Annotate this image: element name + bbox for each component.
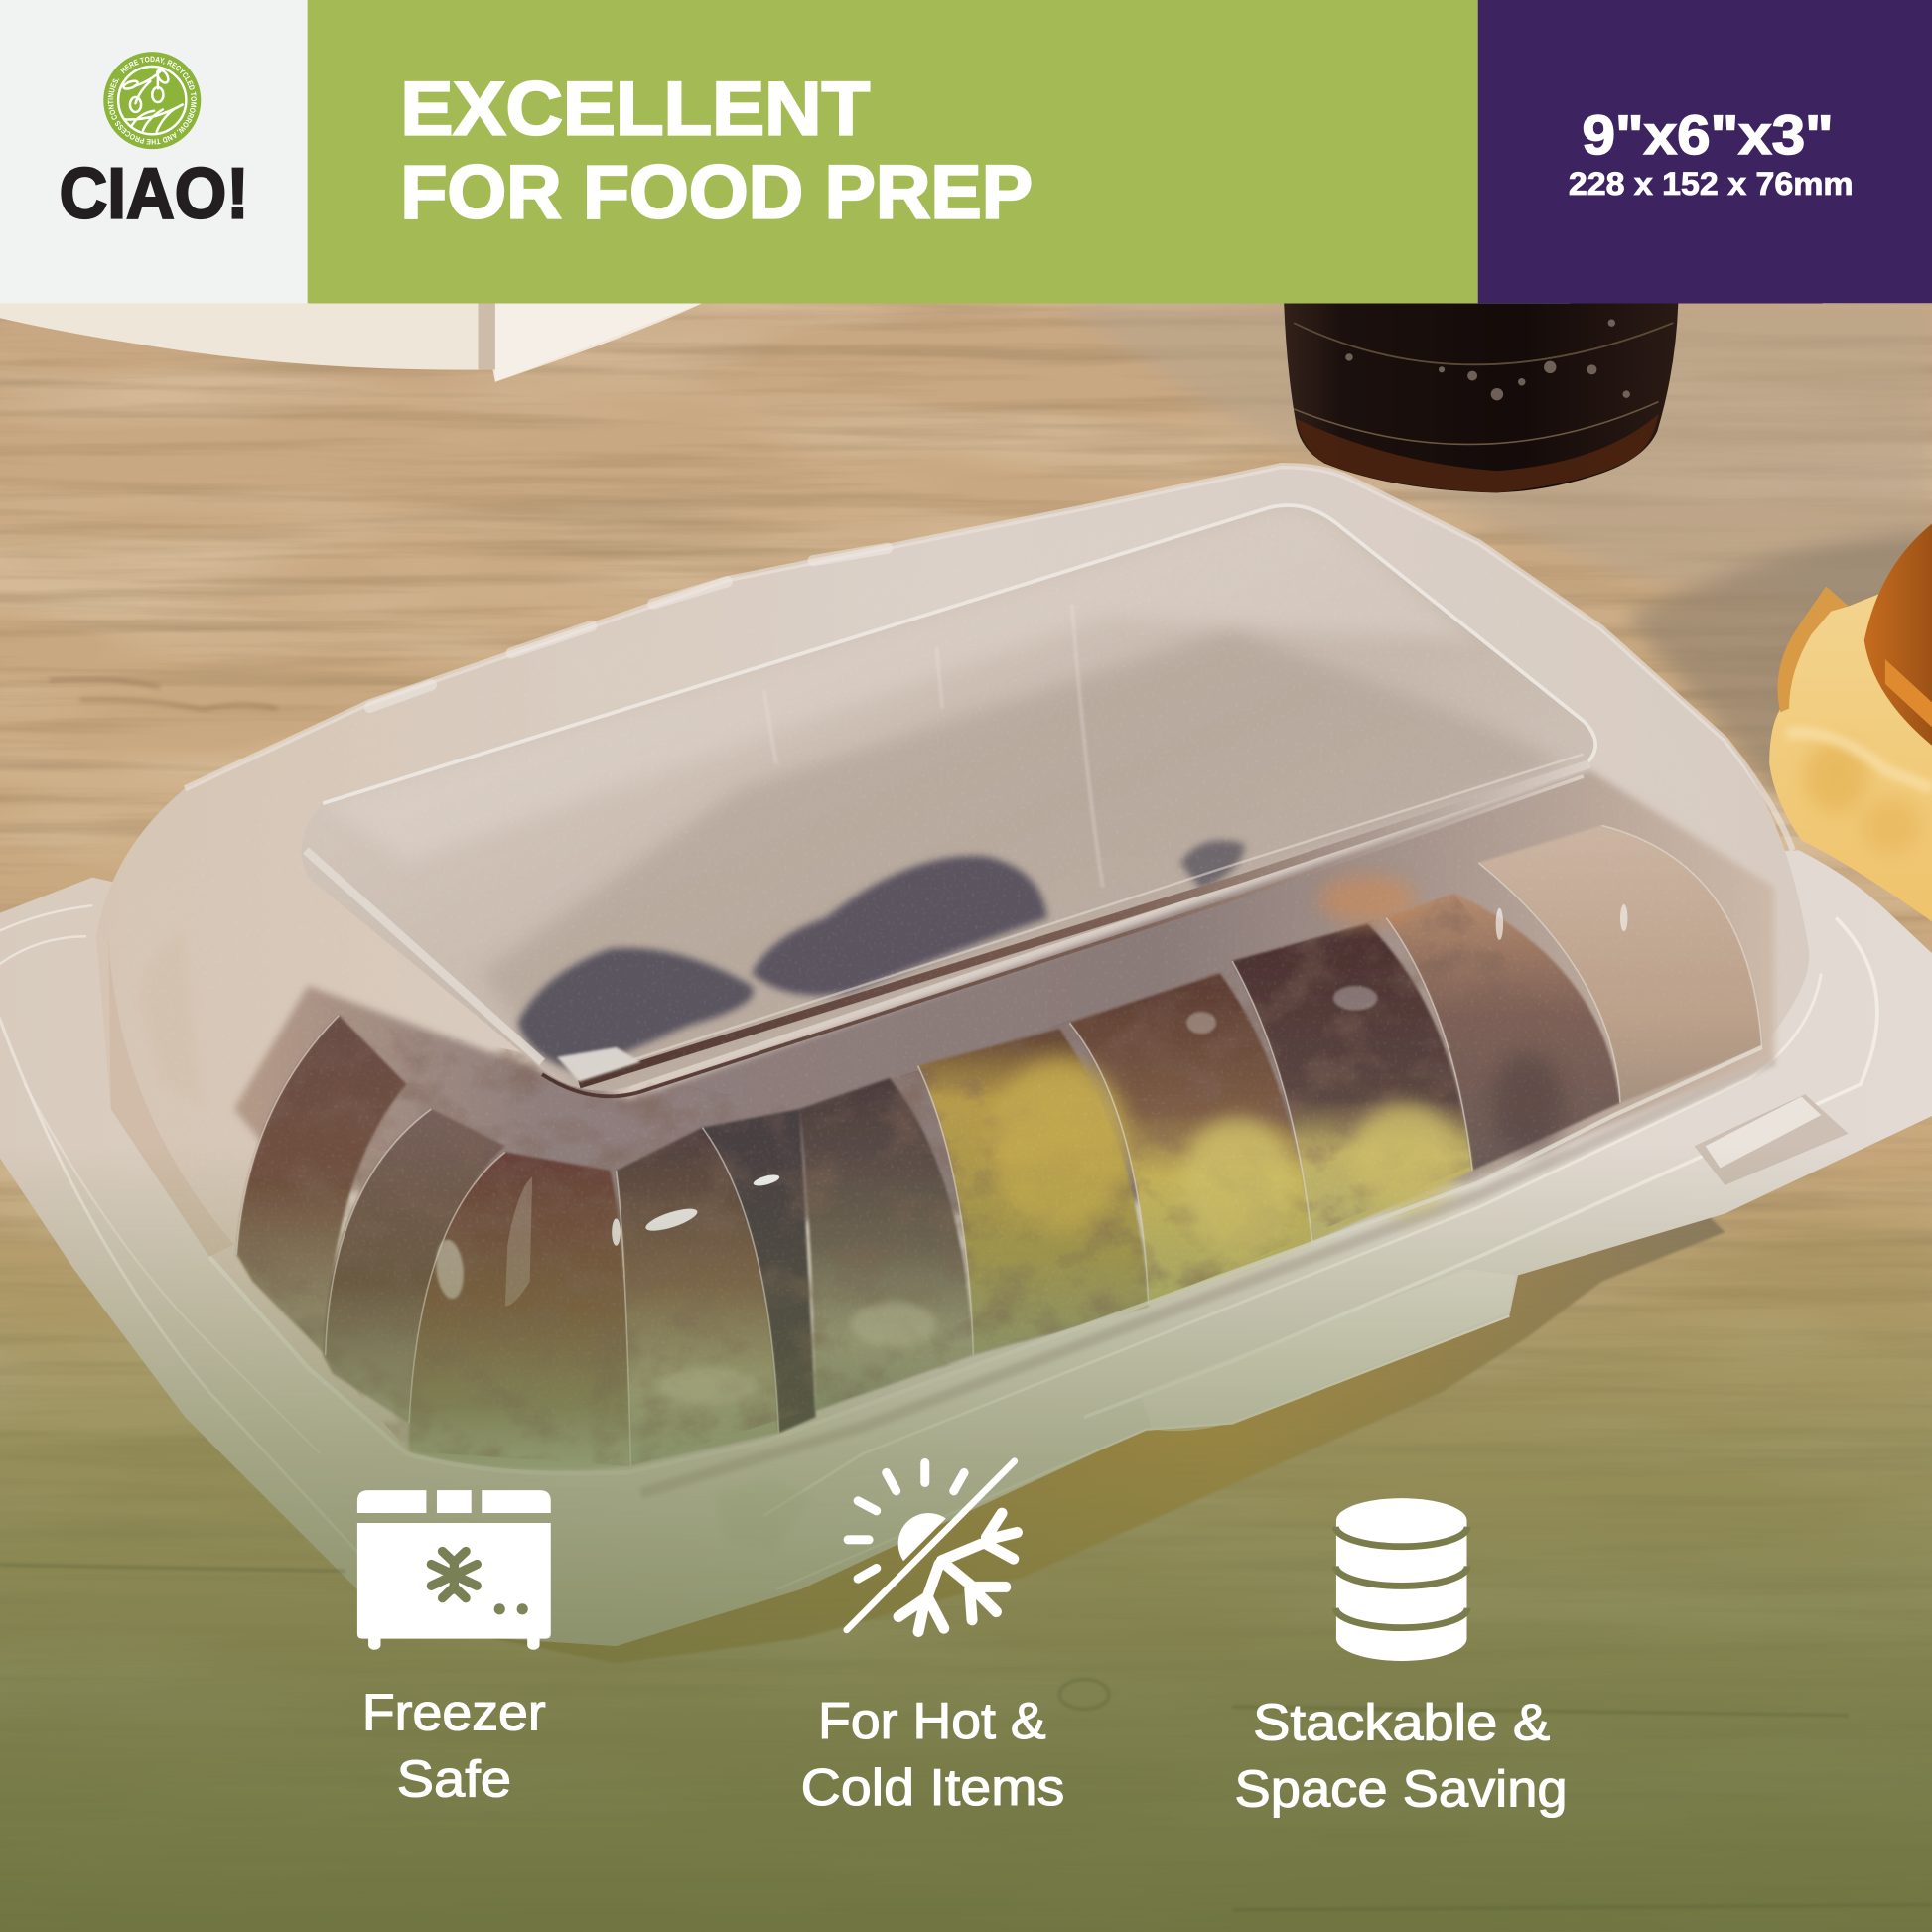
header: logo panel [0,0,347,304]
label: for hot and cold items: For Hot & [818,1693,1046,1750]
bread bun [1769,523,1932,921]
header: size panel [1478,0,1932,303]
wood knot and dark grain lines [0,1565,1932,1910]
logo emblem: HERE TODAY, RECYCLED TOMORROW. AND THE PROCESS CONTINUES. [107,56,197,145]
feature: hot and cold [801,1461,1064,1817]
paper towel roll [0,303,702,382]
rib edge lines [236,826,1762,1466]
icon: stacked discs [1335,1498,1467,1661]
feature: stackable [1235,1498,1568,1818]
feature: freezer safe [357,1490,551,1808]
size in millimetres: 228 x 152 x 76mm [1569,166,1854,202]
label: for hot and cold items: Cold Items [801,1759,1064,1817]
label: stackable and space saving: Space Saving [1235,1760,1568,1818]
label: freezer safe: Safe [397,1750,511,1808]
container: front rim around wall [209,1047,1762,1473]
olive gradient overlay [0,1146,1932,1932]
container: ribbed front wall with food [236,826,1762,1470]
container: recessed lid panel [302,505,1595,1109]
container: dome lid body [96,463,1809,1269]
ribs group [236,826,1762,1470]
container: lower tray with food [496,1217,1725,1663]
label: freezer safe [362,1684,546,1808]
container: base flange [0,850,1932,1646]
size in inches: 9"x6"x3" [1583,103,1834,166]
title [400,67,1033,235]
header: title panel [308,0,1478,303]
specular highlights [433,904,1627,1405]
texture specks on plastic [96,479,1811,1472]
label: freezer safe: Freezer [362,1684,546,1741]
soda cup [1284,303,1678,492]
title: FOR FOOD PREP [400,151,1033,235]
food: mottled texture [236,894,1620,1466]
icon: crossed sun and snowflake [847,1461,1017,1631]
container: wall band beneath lid [234,770,1774,1232]
label: for hot and cold items [801,1693,1064,1817]
icon: freezer [357,1490,551,1650]
food: golden pieces [988,875,1565,1261]
label: stackable and space saving [1235,1694,1568,1818]
title: EXCELLENT [400,67,870,151]
brand name: CIAO! [60,155,249,234]
label: stackable and space saving: Stackable & [1253,1694,1550,1751]
